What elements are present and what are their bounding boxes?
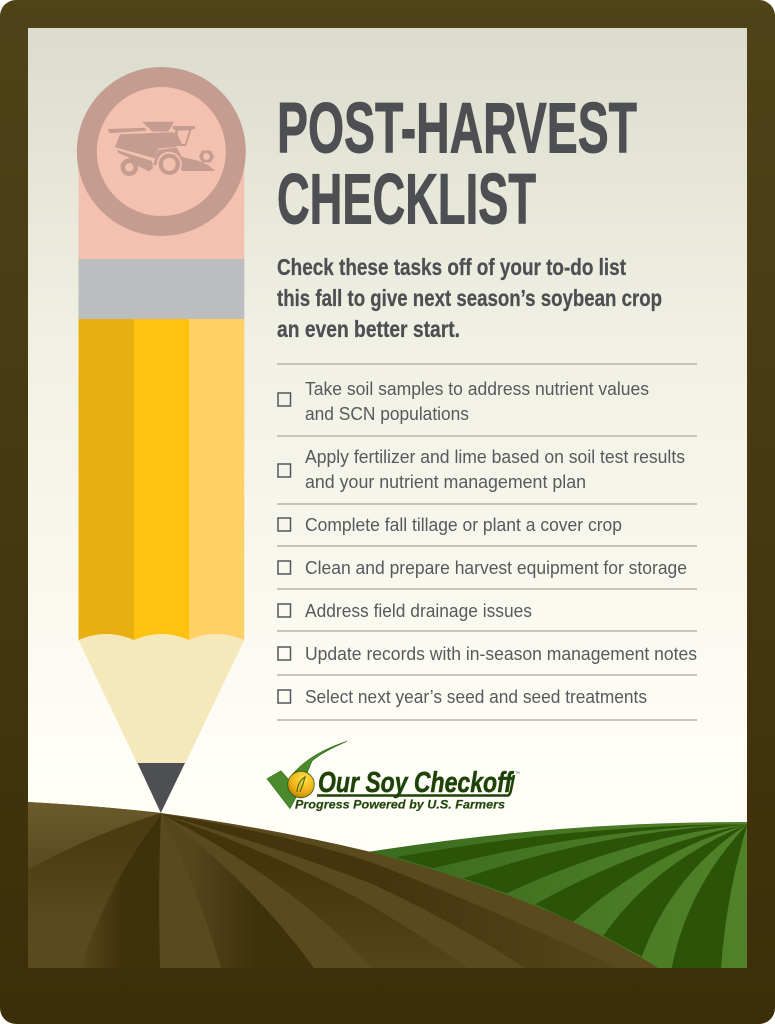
checklist item 4: Clean and prepare harvest equipment for storage bbox=[305, 558, 687, 578]
checklist item 1: Take soil samples to address nutrient values bbox=[305, 379, 649, 399]
intro text: an even better start. bbox=[277, 316, 460, 342]
checklist item 3: Complete fall tillage or plant a cover crop bbox=[305, 515, 622, 535]
illustration: green field bbox=[367, 822, 747, 968]
checklist item 2 bbox=[278, 447, 685, 492]
title: CHECKLIST bbox=[277, 160, 536, 239]
illustration: brown soil hill bbox=[28, 802, 658, 968]
logo tagline: Progress Powered by U.S. Farmers bbox=[295, 799, 506, 812]
pencil graphite point bbox=[138, 763, 185, 813]
intro text bbox=[277, 254, 662, 342]
checklist bbox=[277, 364, 697, 720]
checklist item 2: and your nutrient management plan bbox=[305, 472, 586, 492]
checklist item 6: Update records with in-season management notes bbox=[305, 644, 697, 664]
logo trademark: ™ bbox=[515, 771, 520, 777]
pencil eraser bbox=[78, 152, 244, 260]
checklist item 2: Apply fertilizer and lime based on soil test results bbox=[305, 447, 685, 467]
checklist item 7: Select next year’s seed and seed treatments bbox=[305, 687, 647, 707]
logo soybean seed bbox=[288, 771, 314, 798]
pencil ferrule bbox=[78, 259, 244, 319]
icon: combine harvester badge bbox=[87, 77, 236, 226]
pencil bbox=[78, 152, 244, 813]
logo checkmark bbox=[267, 741, 347, 809]
title bbox=[277, 90, 637, 239]
checklist item 5: Address field drainage issues bbox=[305, 601, 532, 621]
logo: Our Soy Checkoff bbox=[267, 741, 520, 812]
icon: combine harvester bbox=[107, 122, 216, 177]
intro text: this fall to give next season’s soybean crop bbox=[277, 285, 662, 311]
pencil yellow body bbox=[78, 319, 244, 641]
intro text: Check these tasks off of your to-do list bbox=[277, 254, 626, 280]
checklist item 1: and SCN populations bbox=[305, 404, 469, 424]
checklist item 1 bbox=[278, 379, 649, 424]
logo underline bbox=[317, 775, 514, 796]
logo wordmark: Our Soy Checkoff bbox=[318, 767, 515, 799]
pencil wood tip bbox=[78, 634, 244, 764]
